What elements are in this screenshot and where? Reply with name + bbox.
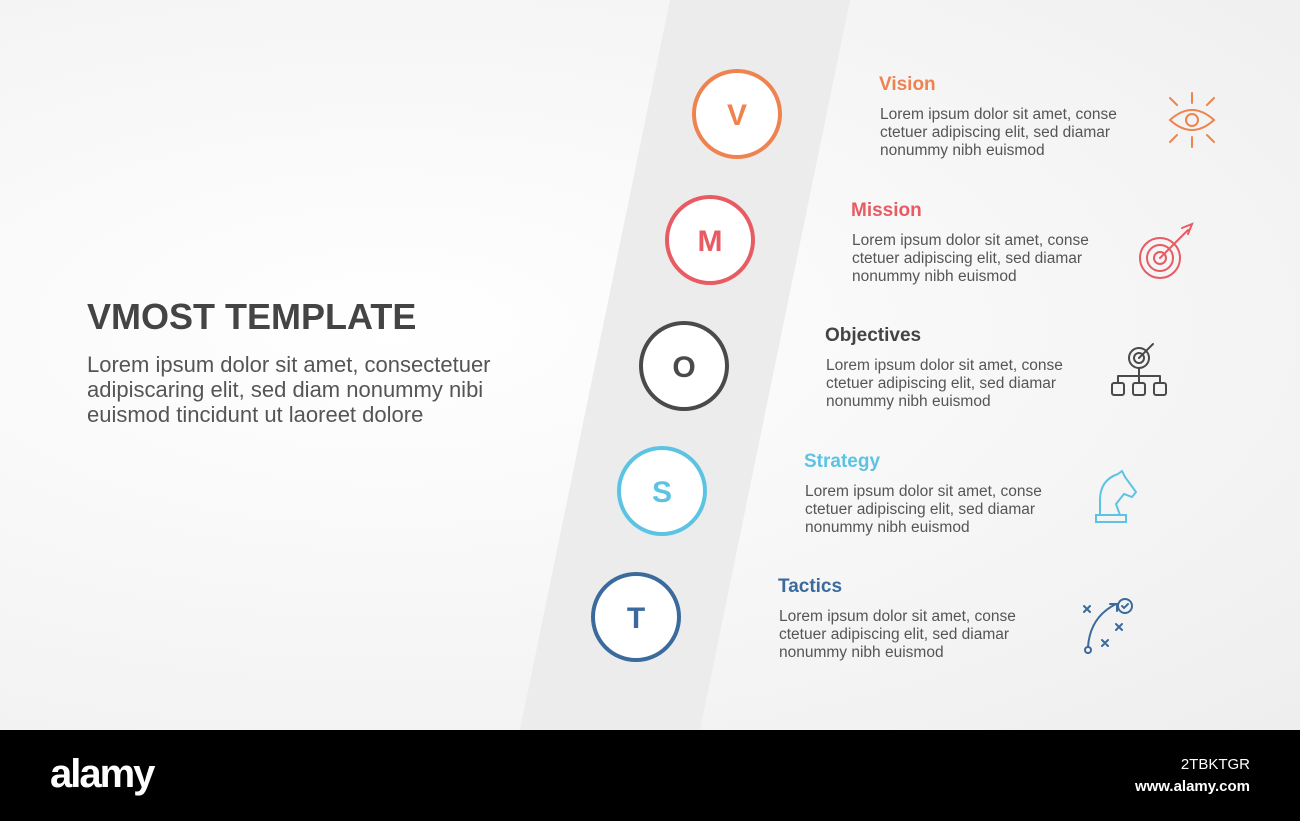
intro text: adipiscaring elit, sed diam nonummy nibi: [87, 377, 483, 402]
footer bar: 2TBKTGR: [1181, 756, 1250, 773]
circle T: [593, 574, 679, 660]
item: Vision: [879, 74, 1117, 159]
intro text: euismod tincidunt ut laoreet dolore: [87, 402, 423, 427]
intro text: [87, 352, 491, 427]
circle O: O: [672, 351, 696, 384]
text: nonummy nibh euismod: [852, 268, 1017, 285]
title: VMOST TEMPLATE: [87, 296, 416, 337]
circle S: [619, 448, 705, 534]
item: Mission: [851, 200, 1089, 285]
text: Lorem ipsum dolor sit amet, conse: [852, 232, 1089, 249]
text: Lorem ipsum dolor sit amet, conse: [826, 357, 1063, 374]
text: nonummy nibh euismod: [826, 393, 991, 410]
icon: objectives hierarchy: [1112, 344, 1166, 395]
text: Mission: [851, 200, 922, 221]
text: Lorem ipsum dolor sit amet, conse: [779, 608, 1016, 625]
text: Lorem ipsum dolor sit amet, conse: [880, 106, 1117, 123]
circle M: [667, 197, 753, 283]
footer bar: www.alamy.com: [1135, 778, 1250, 795]
text: Objectives: [825, 325, 921, 346]
text: ctetuer adipiscing elit, sed diamar: [805, 501, 1035, 518]
text: nonummy nibh euismod: [880, 142, 1045, 159]
text: Strategy: [804, 451, 880, 472]
icon: tactics play: [1084, 599, 1132, 653]
icon: eye: [1170, 93, 1214, 147]
text: nonummy nibh euismod: [805, 519, 970, 536]
circle V: [694, 71, 780, 157]
footer bar: [0, 730, 1300, 821]
text: ctetuer adipiscing elit, sed diamar: [826, 375, 1056, 392]
text: nonummy nibh euismod: [779, 644, 944, 661]
circle S: S: [652, 476, 672, 509]
circle T: T: [627, 602, 645, 635]
icon: target: [1140, 224, 1192, 278]
item: Strategy: [804, 451, 1042, 536]
item: Tactics: [778, 576, 1016, 661]
circle V: V: [727, 99, 747, 132]
text: ctetuer adipiscing elit, sed diamar: [779, 626, 1009, 643]
icon: knight: [1096, 471, 1136, 522]
text: ctetuer adipiscing elit, sed diamar: [880, 124, 1110, 141]
circle O: [641, 323, 727, 409]
text: Lorem ipsum dolor sit amet, conse: [805, 483, 1042, 500]
item: Objectives: [825, 325, 1063, 410]
text: Vision: [879, 74, 936, 95]
text: Tactics: [778, 576, 842, 597]
footer bar: alamy: [50, 752, 153, 796]
circle M: M: [698, 225, 722, 258]
text: ctetuer adipiscing elit, sed diamar: [852, 250, 1082, 267]
intro text: Lorem ipsum dolor sit amet, consectetuer: [87, 352, 491, 377]
